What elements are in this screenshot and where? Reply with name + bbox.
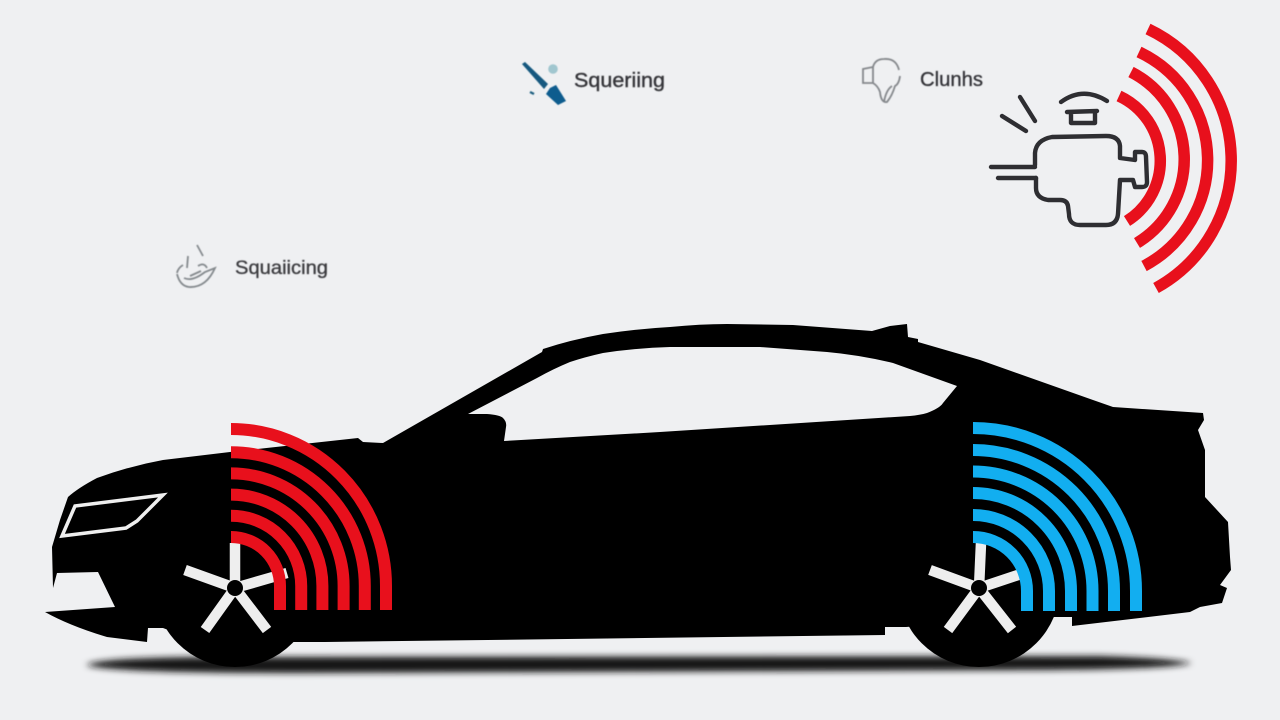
rear wheel — [898, 505, 1060, 667]
icon: flame over dish — [177, 245, 215, 287]
icon: engine — [991, 94, 1147, 225]
front wheel — [154, 505, 316, 667]
label: top centre: Squeriing — [574, 70, 665, 92]
car body with window cut-out — [45, 324, 1231, 642]
label: left: Squaiicing — [235, 258, 328, 279]
blue sound waves at rear wheel — [973, 428, 1136, 611]
red sound waves from engine — [1119, 29, 1231, 288]
headlight — [62, 495, 163, 536]
icon: hand — [863, 59, 900, 102]
car silhouette — [45, 324, 1231, 667]
red sound waves at front wheel — [231, 429, 386, 610]
icon: tool with droplet — [522, 62, 566, 105]
label: top right: Clunhs — [920, 69, 983, 91]
ground shadow — [86, 656, 1192, 673]
